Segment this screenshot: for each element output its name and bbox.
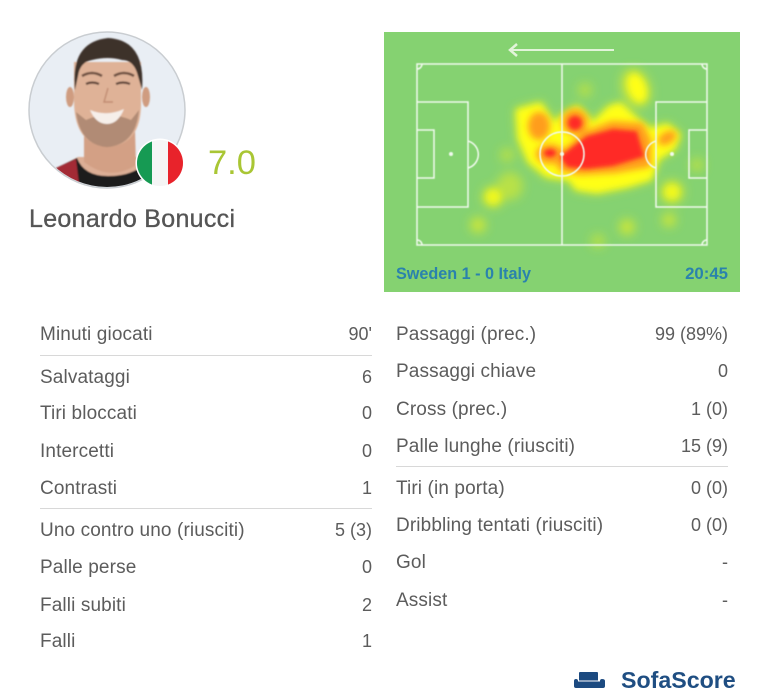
- stat: Tiri: Tiri (in porta): [396, 478, 505, 499]
- stat: Intercetti: [40, 441, 372, 462]
- stat: Falli subiti: 2: [362, 595, 372, 615]
- match time: 20:45: [685, 264, 728, 283]
- stat: Passaggi: [396, 324, 728, 345]
- stat: Uno contro uno: [40, 520, 372, 541]
- stat: Tiri bloccati: [40, 403, 372, 424]
- stat: Passaggi: Passaggi (prec.): [396, 324, 536, 345]
- stat: Palle perse: [40, 557, 372, 578]
- stat: Assist: -: [722, 590, 728, 610]
- stat: Contrasti: Contrasti: [40, 478, 117, 499]
- player rating: 7.0: [208, 144, 256, 182]
- icon: Italian flag: [136, 138, 184, 188]
- stat: Tiri: 0 (0): [691, 478, 728, 498]
- panel: left stats: [40, 324, 372, 652]
- stat: Salvataggi: Salvataggi: [40, 367, 130, 388]
- stat: Passaggi chiave: [396, 361, 728, 382]
- stat: Passaggi chiave: 0: [718, 361, 728, 381]
- stat: Falli subiti: [40, 595, 372, 616]
- stat: Cross: 1 (0): [691, 399, 728, 419]
- stat: Dribbling: [396, 515, 728, 536]
- stat: Falli: Falli: [40, 631, 75, 652]
- SofaScore wordmark: SofaScore: [621, 667, 736, 693]
- stat: Dribbling: Dribbling tentati (riusciti): [396, 515, 603, 536]
- stat: Palle perse: 0: [362, 557, 372, 577]
- football pitch lines: [417, 64, 707, 245]
- stat: Tiri: [396, 478, 728, 499]
- stat: Dribbling: 0 (0): [691, 515, 728, 535]
- stat: Cross: Cross (prec.): [396, 399, 507, 420]
- stat: Minuti giocati: Minuti giocati: [40, 324, 153, 345]
- stat: Palle lunghe: 15 (9): [681, 436, 728, 456]
- stat: Tiri bloccati: Tiri bloccati: [40, 403, 137, 424]
- stat: Falli subiti: Falli subiti: [40, 595, 126, 616]
- player name: Leonardo Bonucci: [29, 205, 235, 233]
- stat: Falli: 1: [362, 631, 372, 651]
- stat: Assist: Assist: [396, 590, 447, 611]
- stat: Contrasti: 1: [362, 478, 372, 498]
- stat: Passaggi: 99 (89%): [655, 324, 728, 344]
- stat: Minuti giocati: [40, 324, 372, 345]
- stat: Intercetti: 0: [362, 441, 372, 461]
- stat: Palle lunghe: Palle lunghe (riusciti): [396, 436, 575, 457]
- stat: Palle lunghe: [396, 436, 728, 457]
- panel: heatmap: [384, 32, 740, 292]
- player photo: [28, 31, 186, 189]
- icon: SofaScore sofa logo: [574, 672, 605, 688]
- stat: Falli: [40, 631, 372, 652]
- attack direction arrow: [510, 44, 614, 56]
- stat: Gol: Gol: [396, 552, 426, 573]
- stat: Uno contro uno: Uno contro uno (riusciti): [40, 520, 245, 541]
- match score: Sweden 1 - 0 Italy: [396, 265, 531, 283]
- stat: Salvataggi: [40, 367, 372, 388]
- stat: Passaggi chiave: Passaggi chiave: [396, 361, 536, 382]
- stat: Uno contro uno: 5 (3): [335, 520, 372, 540]
- stat: Tiri bloccati: 0: [362, 403, 372, 423]
- panel: right stats: [396, 324, 728, 611]
- stat: Palle perse: Palle perse: [40, 557, 136, 578]
- stat: Minuti giocati: 90': [349, 324, 372, 344]
- heatmap blobs: [473, 68, 701, 245]
- stat: Salvataggi: 6: [362, 367, 372, 387]
- stat: Cross: [396, 399, 728, 420]
- stat: Assist: [396, 590, 728, 611]
- stat: Contrasti: [40, 478, 372, 499]
- stat: Intercetti: Intercetti: [40, 441, 114, 462]
- stat: Gol: [396, 552, 728, 573]
- stat: Gol: -: [722, 552, 728, 572]
